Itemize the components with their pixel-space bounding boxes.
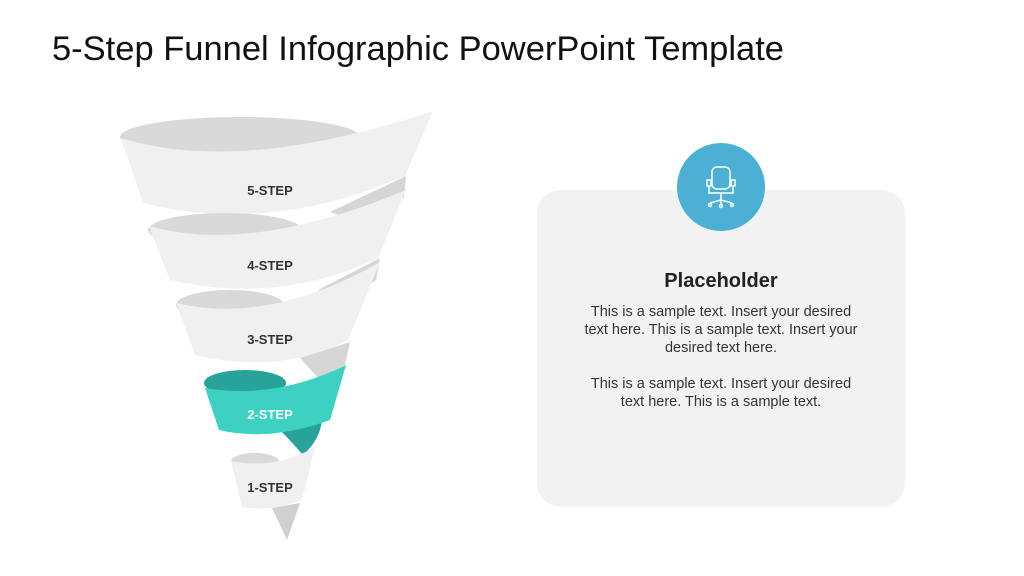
text block 1: desired text here. [665,340,777,356]
band 3: 3-STEP [247,332,293,347]
icon: office chair [677,143,765,231]
band 4: 4-STEP [247,258,293,273]
back wedges [330,176,406,226]
title: 5-Step Funnel Infographic PowerPoint Template [52,30,784,68]
band 1: 1-STEP [247,480,293,495]
text block 2: text here. This is a sample text. [621,394,821,410]
panel: card [537,190,905,507]
band 2 (highlighted) [204,365,346,455]
band 4 [148,190,406,289]
text block 2 [591,376,851,410]
text block 1: text here. This is a sample text. Insert your [585,322,857,338]
text block 2: This is a sample text. Insert your desired [591,376,851,392]
band 5 [120,111,433,214]
heading: Placeholder [664,270,778,292]
band 2 (highlighted): 2-STEP [247,407,293,422]
band 5: 5-STEP [247,183,293,198]
text block 1: This is a sample text. Insert your desired [591,304,851,320]
text block 1 [584,304,858,356]
tip [272,503,300,540]
band 1 [231,447,315,508]
band 3 [176,262,380,362]
